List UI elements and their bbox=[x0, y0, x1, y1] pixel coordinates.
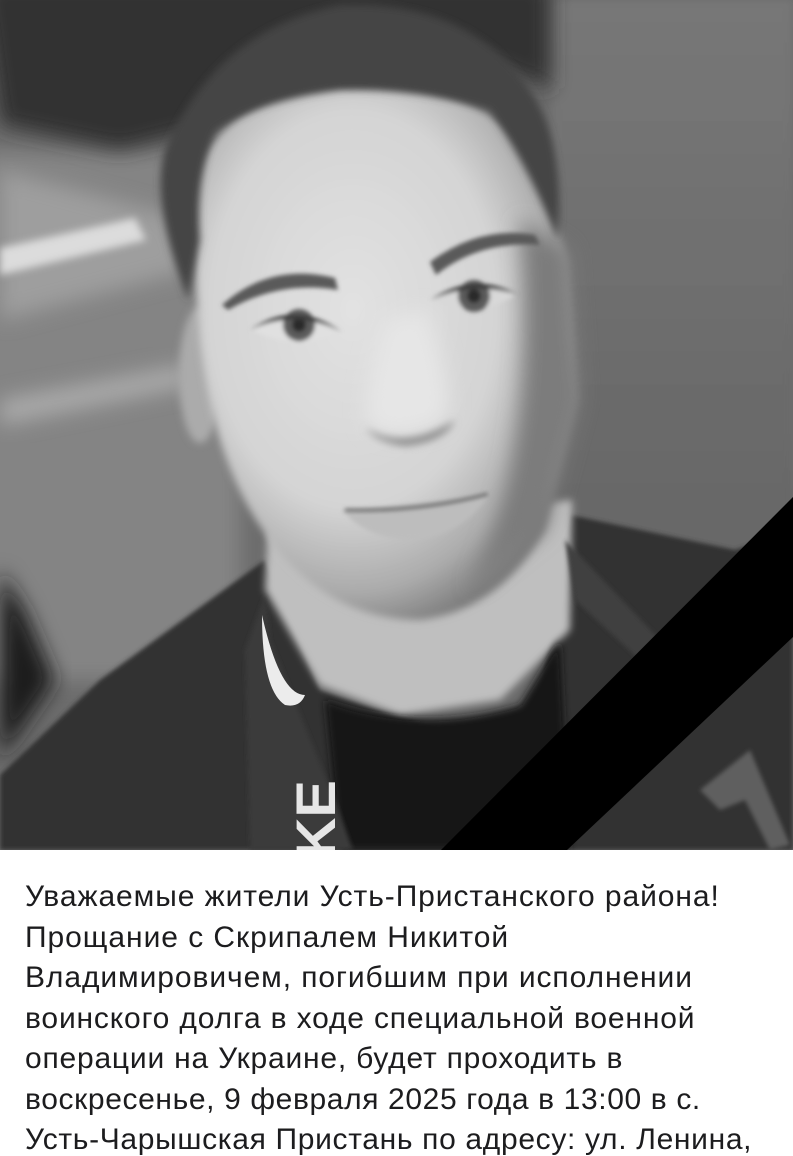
nose bbox=[366, 310, 448, 434]
announcement text: воскресенье, 9 февраля 2025 года в 13:00 в с. bbox=[25, 1082, 701, 1116]
announcement text: Прощание с Скрипалем Никитой bbox=[25, 920, 509, 954]
lanyard swoosh logo bbox=[262, 615, 305, 706]
keys bbox=[700, 750, 790, 850]
face bbox=[190, 85, 578, 620]
background bbox=[0, 0, 793, 850]
sweatshirt bbox=[0, 515, 793, 850]
eyebrow left bbox=[222, 274, 338, 310]
neck bbox=[265, 500, 572, 715]
announcement text: Уважаемые жители Усть-Пристанского района! bbox=[25, 880, 720, 913]
eye left bbox=[250, 309, 342, 342]
announcement text: Владимировичем, погибшим при исполнении bbox=[25, 961, 693, 994]
announcement text bbox=[25, 880, 752, 1156]
memorial portrait photo with mourning ribbon bbox=[0, 0, 793, 850]
t-shirt collar bbox=[325, 640, 570, 850]
mouth bbox=[342, 492, 490, 540]
eyebrow right bbox=[430, 233, 540, 275]
announcement text: операции на Украине, будет проходить в bbox=[25, 1042, 623, 1075]
announcement text: Усть-Чарышская Пристань по адресу: ул. Ленина, bbox=[25, 1123, 752, 1156]
lanyard strap bbox=[245, 595, 353, 850]
announcement text: воинского долга в ходе специальной военной bbox=[25, 1002, 695, 1034]
eye right bbox=[430, 280, 518, 312]
ear bbox=[179, 307, 221, 443]
hair bbox=[161, 5, 559, 300]
second lanyard strap bbox=[565, 540, 660, 660]
black mourning ribbon bbox=[441, 497, 793, 850]
face shadow bbox=[470, 220, 580, 590]
